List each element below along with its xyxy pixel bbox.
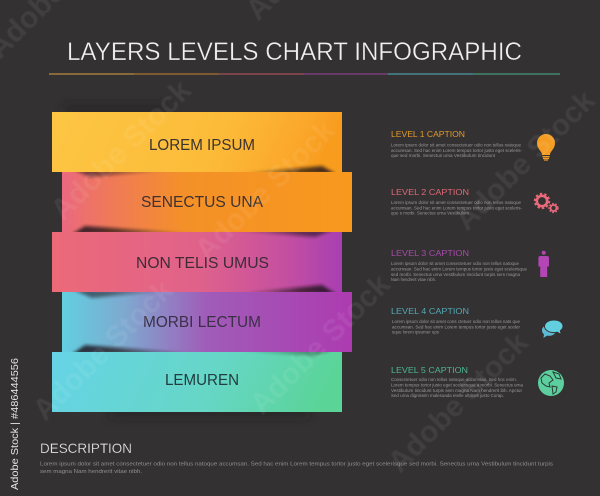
caption 5: LEVEL 5 CAPTION (391, 365, 468, 375)
caption 3: sed morbi. Senectus urna Vestibulum tincidunt turpis sem magna (391, 272, 520, 278)
caption 1: accumsan. Sed hac enim Lorem tempus tortor justo eget sceleris- (391, 148, 522, 154)
caption 4: accumsan. Sed hac enim Lorem tempus tortor justo eget sceler (392, 324, 520, 330)
watermark: Adobe Stock (189, 114, 342, 267)
caption 2: Lorem ipsum dolor sit amet consectetuer odio non tellus natoque (391, 200, 521, 206)
caption 3: LEVEL 3 CAPTION (391, 248, 469, 258)
caption 1: LEVEL 1 CAPTION (391, 129, 465, 139)
caption 2 (391, 187, 522, 216)
icon: chat bubbles (542, 320, 563, 338)
caption 2: que s morbi. Senectus urna Vestibulum (391, 210, 469, 216)
icon: person (538, 251, 549, 277)
icon: gears (535, 194, 558, 212)
caption 5: Vestibulum tincidunt turpis sem magna Nam hendrerit ibh. Apctur (391, 388, 522, 394)
description heading: DESCRIPTION (40, 440, 132, 456)
description body: sem magna Nam hendrerit vitae nibh. (40, 469, 142, 475)
layer 3 (52, 230, 342, 294)
title: LAYERS LEVELS CHART INFOGRAPHIC (67, 38, 522, 66)
watermark: Adobe Stock (45, 74, 198, 227)
icon: globe (538, 370, 564, 396)
watermark: Adobe Stock (449, 84, 600, 237)
caption 5: Lorem tempus tortor justo eget scelerisque a morbi. Senectus urna (391, 382, 523, 388)
caption 4: LEVEL 4 CAPTION (391, 306, 469, 316)
caption 4: sque lorem ipsumer ups (392, 330, 440, 336)
layer 1 (52, 112, 342, 174)
layer 3: NON TELIS UMUS (136, 255, 269, 272)
caption 4: Lorem ipsum dolor sit amet cons ctetuer odio non tellus nats que (392, 319, 520, 325)
layer 5 (52, 350, 342, 412)
title divider (49, 73, 560, 75)
caption 1: Lorem ipsum dolor sit amet consectetuer odio non tellus natoque (391, 142, 521, 148)
icon: light bulb (537, 134, 555, 161)
caption 1 (391, 129, 522, 159)
layer 1: LOREM IPSUM (149, 137, 255, 154)
caption 3 (391, 248, 527, 283)
layer 2 (62, 170, 352, 234)
layered chart (52, 112, 352, 412)
layer 4: MORBI LECTUM (143, 314, 261, 331)
watermark: Adobe Stock (382, 326, 535, 479)
watermark: Adobe Stock (27, 274, 180, 427)
caption 3: Lorem ipsum dolor sit amet consectetuer odio non tellus natoque (391, 261, 519, 267)
caption 5 (391, 365, 523, 399)
soft shadows behind layers (65, 106, 310, 416)
watermark: Adobe Stock (244, 268, 397, 421)
layer 5: LEMUREN (165, 372, 239, 389)
caption 2: accumsan. Sed hac enim Lorem tempus tortor justo eget sceleris- (391, 206, 522, 212)
layer 2: SENECTUS UNA (141, 194, 264, 211)
caption 5: Consectetuer odio non tellus natoque accumsan. Sed hoc enim. (391, 377, 517, 383)
stock id side text: Adobe Stock | #486444556 (9, 358, 21, 490)
caption 4 (391, 306, 520, 336)
description body (40, 462, 553, 475)
caption 1: que sed morbi. Senectus urna Vestibulum tincidunt (391, 153, 496, 159)
caption 3: accumsan. Sed hac enim Lorem tempus tortor justo eget scelerisque (391, 266, 527, 272)
caption 5: Sed urna dignissim malesuada etelle ultrices justo Curap. (391, 393, 504, 399)
description body: Lorem ipsum dolor sit amet consectetuer odio non tellus natoque accumsan. Sed hac enim Lorem tempus tortor justo eget scelerisque sed morbi. Senectus urna Vestibulum tincidunt turpis (40, 462, 553, 468)
caption 3: Nam hendrerit vitae nibh. (391, 277, 436, 283)
layer 4 (62, 290, 352, 354)
caption 2: LEVEL 2 CAPTION (391, 187, 469, 197)
